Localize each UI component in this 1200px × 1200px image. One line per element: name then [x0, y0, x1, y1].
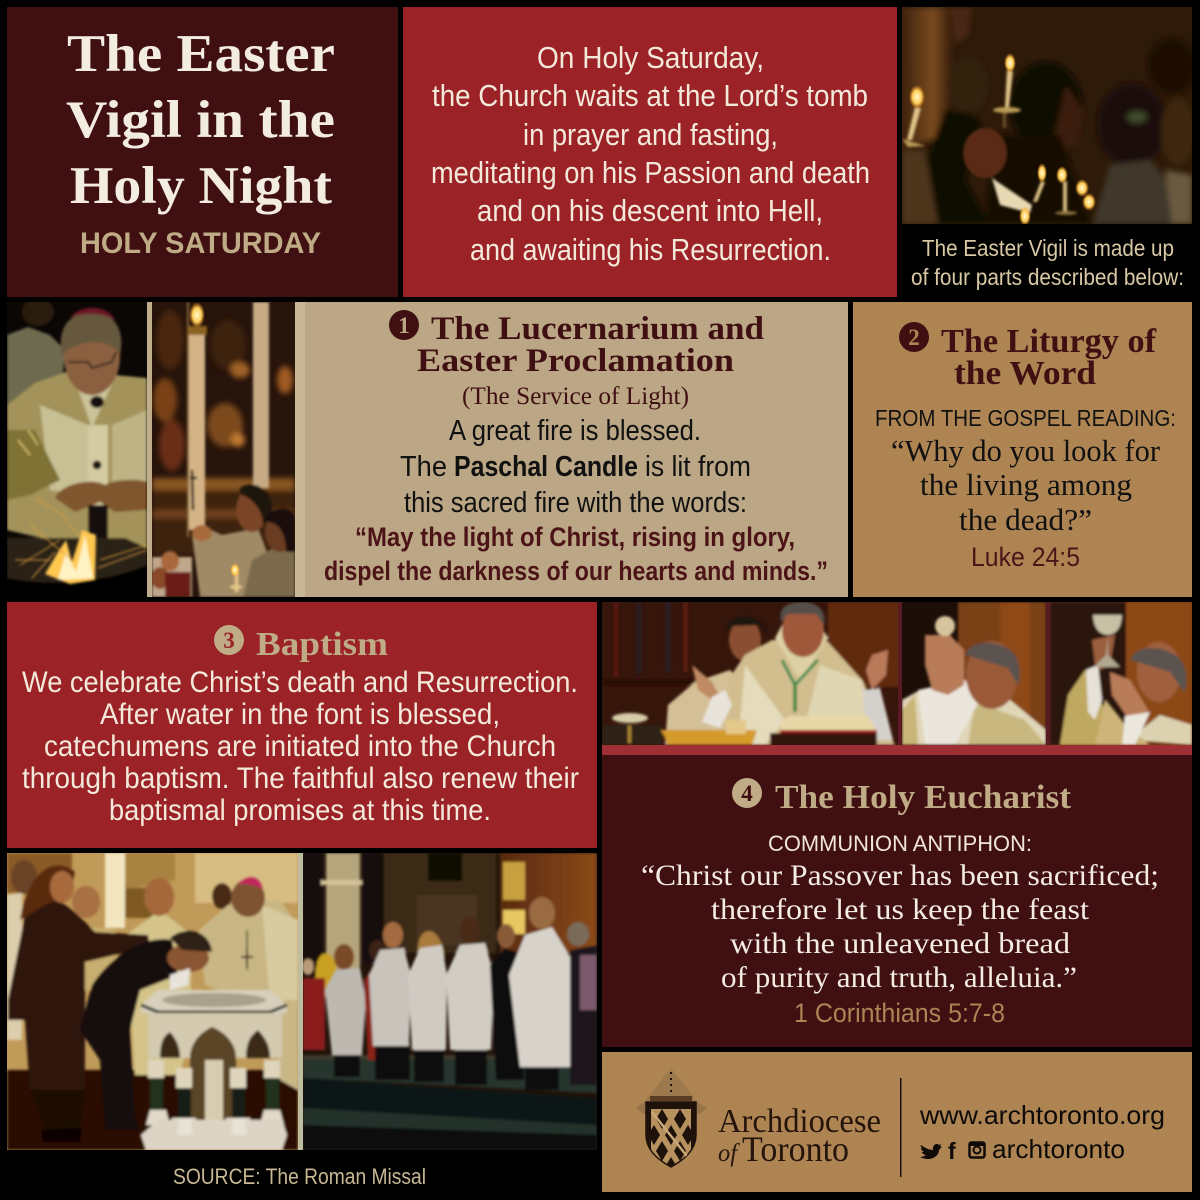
- photo divider: [898, 602, 902, 745]
- heading: The Easter Vigil in the Holy Night: Vigil in the: [66, 91, 335, 149]
- heading: The Holy Eucharist: The Holy Eucharist: [775, 779, 1072, 816]
- subheading: The Service of Light: (The Service of Light): [462, 383, 689, 410]
- divider strip: [298, 853, 303, 1150]
- heading: Baptism: Baptism: [256, 626, 388, 663]
- panel: Holy Saturday introduction: [403, 7, 897, 297]
- quote: may the light of Christ: dispel the darkness of our hearts and minds.”: [324, 556, 828, 586]
- icon: twitter: [920, 1144, 942, 1159]
- text block: baptism description: We celebrate Christ’s death and Resurrection.: [22, 666, 578, 699]
- citation: Luke 24:5: Luke 24:5: [971, 542, 1080, 572]
- photo: archbishop at the altar: [602, 602, 900, 745]
- icon: facebook: f: [948, 1138, 956, 1164]
- panel: part 2 The Liturgy of the Word: [853, 302, 1192, 597]
- heading: The Easter Vigil in the Holy Night: The Easter: [67, 25, 335, 83]
- photo divider: [1046, 602, 1050, 745]
- text block: baptism description: catechumens are initiated into the Church: [44, 730, 556, 763]
- panel: part 3 Baptism: [7, 602, 597, 848]
- icon: number 2: 2: [908, 325, 920, 350]
- logo text: Archdiocese of Toronto: [718, 1103, 881, 1169]
- text block: baptism description: [22, 666, 579, 827]
- heading: The Lucernarium and Easter Proclamation: The Lucernarium and: [431, 311, 764, 347]
- photo: elevation of the chalice: [1050, 602, 1192, 745]
- text block: introduction: in prayer and fasting,: [523, 117, 778, 152]
- quote: why do you look: “Why do you look for: [891, 433, 1161, 468]
- heading: The Lucernarium and Easter Proclamation: [417, 311, 764, 379]
- citation: 1 Corinthians: 1 Corinthians 5:7-8: [794, 998, 1005, 1028]
- quote: why do you look: [891, 433, 1161, 537]
- text block: blessing of the fire: The: [400, 451, 447, 483]
- quote: may the light of Christ: [324, 522, 828, 586]
- icon: number 4: [732, 778, 762, 808]
- logo text: Archdiocese of Toronto: Toronto: [742, 1129, 849, 1169]
- panel: footer: [602, 1052, 1192, 1192]
- divider strip: [147, 302, 152, 597]
- icon: number 1: [389, 310, 419, 340]
- heading: The Liturgy of the Word: The Liturgy of: [941, 323, 1157, 360]
- photo: Paschal candle: [151, 302, 295, 597]
- heading: The Easter Vigil in the Holy Night: Holy Night: [70, 157, 332, 215]
- handle: archtoronto: [992, 1134, 1125, 1164]
- text block: blessing of the fire: Paschal Candle: [454, 451, 638, 483]
- icon: number 1: 1: [398, 313, 410, 338]
- label: communion antiphon: COMMUNION ANTIPHON:: [768, 831, 1032, 856]
- panel: title: [7, 7, 398, 297]
- subheading: Holy Saturday: HOLY SATURDAY: [80, 227, 321, 260]
- quote: may the light of Christ: “May the light of Christ, rising in glory,: [355, 522, 795, 552]
- caption: four parts: [911, 235, 1184, 290]
- text block: blessing of the fire: this sacred fire with the words:: [404, 487, 747, 519]
- photo: elevation of the host: [902, 602, 1046, 745]
- text block: blessing of the fire: [400, 415, 751, 519]
- source caption: SOURCE: The Roman Missal: [173, 1164, 426, 1189]
- website: www.archtoronto.org: [919, 1100, 1165, 1130]
- caption: four parts: The Easter Vigil is made up: [922, 235, 1174, 261]
- text block: introduction: and on his descent into Hell,: [477, 193, 823, 228]
- text block: introduction: the Church waits at the Lord’s tomb: [432, 78, 868, 113]
- icon: number 4: 4: [741, 781, 753, 806]
- text block: baptism description: through baptism. The faithful also renew their: [22, 762, 579, 795]
- quote: why do you look: the living among: [920, 467, 1132, 502]
- icon: number 3: [214, 625, 244, 655]
- icon: number 3: 3: [223, 628, 235, 653]
- icon: archdiocese crest: [636, 1068, 707, 1177]
- heading: The Liturgy of the Word: [941, 323, 1157, 392]
- photo: archbishop blessing the fire: [7, 298, 147, 597]
- photo: baptism at the font: [7, 853, 298, 1150]
- text block: introduction: On Holy Saturday,: [537, 40, 764, 75]
- text block: blessing of the fire: is lit from: [645, 451, 751, 483]
- heading: The Lucernarium and Easter Proclamation: Easter Proclamation: [417, 343, 734, 379]
- quote: Christ our Passover: of purity and truth, alleluia.”: [721, 961, 1077, 994]
- icon: number 2: [899, 322, 929, 352]
- text block: introduction: and awaiting his Resurrection.: [470, 232, 831, 267]
- quote: Christ our Passover: [641, 859, 1159, 994]
- quote: why do you look: the dead?”: [959, 502, 1092, 537]
- heading: The Liturgy of the Word: the Word: [954, 355, 1096, 392]
- red bar: [602, 745, 1192, 755]
- panel: part 1 The Lucernarium: [295, 302, 848, 597]
- text block: introduction: [431, 40, 870, 267]
- logo text: Archdiocese of Toronto: Archdiocese: [718, 1103, 881, 1140]
- logo text: Archdiocese of Toronto: of: [718, 1140, 740, 1167]
- text block: baptism description: After water in the font is blessed,: [100, 698, 500, 731]
- heading: The Easter Vigil in the Holy Night: [66, 25, 335, 215]
- quote: Christ our Passover: “Christ our Passover has been sacrificed;: [641, 859, 1159, 892]
- photo: congregation holding candles: [900, 7, 1196, 226]
- photo: catechumens in white robes: [302, 853, 597, 1150]
- text block: blessing of the fire: A great fire is blessed.: [449, 415, 701, 447]
- quote: Christ our Passover: therefore let us keep the feast: [711, 893, 1090, 926]
- text block: baptism description: baptismal promises at this time.: [109, 794, 491, 827]
- panel: part 4 The Holy Eucharist: [602, 755, 1192, 1047]
- text block: introduction: meditating on his Passion and death: [431, 155, 870, 190]
- icon: instagram: [969, 1142, 985, 1158]
- quote: Christ our Passover: with the unleavened bread: [730, 927, 1070, 960]
